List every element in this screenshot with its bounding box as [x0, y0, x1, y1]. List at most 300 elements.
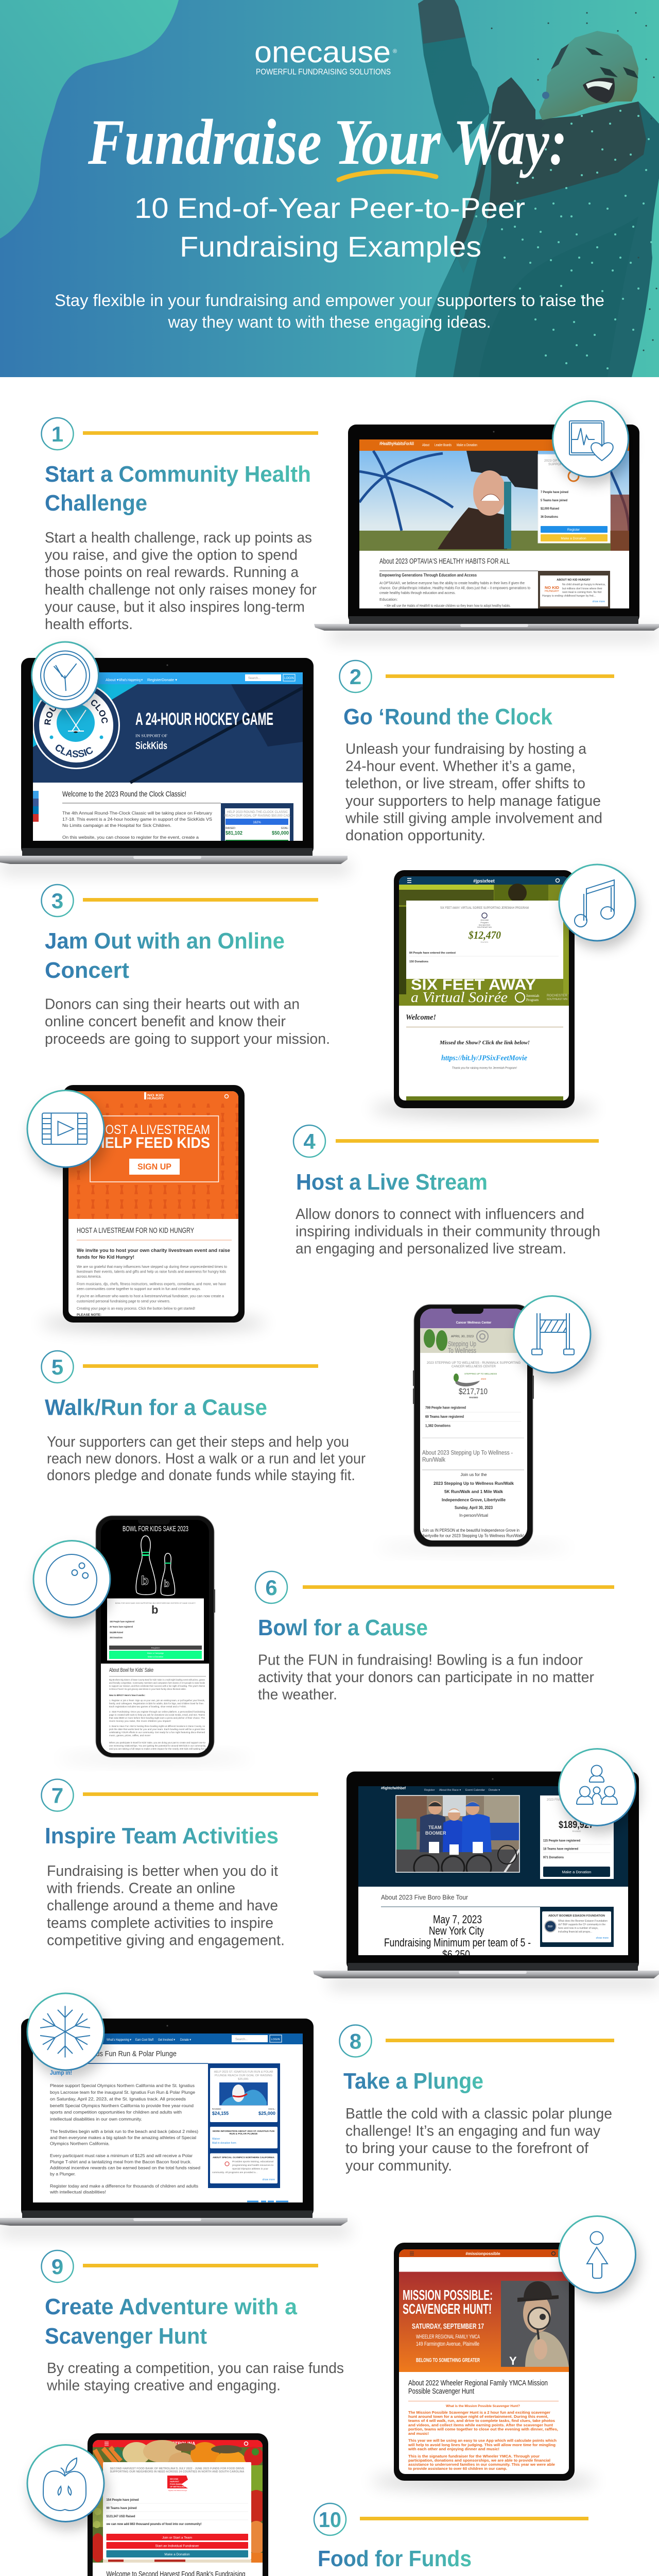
number badge 5: [41, 1351, 73, 1383]
laptop: Round the Clock Classic page: $81,102: [226, 831, 242, 836]
heading 9: Scavenger Hunt: [45, 2324, 207, 2349]
phone: Bowl for Kids Sake page: to support our mission, and then celebrate their success with a fun night of bowling. This year's theme: [109, 1685, 205, 1687]
laptop: OPTAVIA healthy habits page: next meal is coming from. No Kid: [562, 591, 601, 594]
panel: 10 Food for Funds: [27, 2433, 588, 2576]
phone: Bowl for Kids Sake page: family, and colleagues. Registration is $25 for adults, $15 for bigs, and children bowl for free.: [109, 1702, 204, 1705]
phone: Bowl for Kids Sake page: 293 Donations: [110, 1636, 123, 1639]
yellow underline swoosh: [339, 172, 436, 180]
tablet: Second Harvest Food Bank page: Together We Will End Hunger: [168, 2489, 187, 2492]
phone: Bowl for Kids Sake page: celebrating YOUR efforts in our community. Get ready for a fun night featuring disco-themed: [109, 1731, 205, 1734]
body text 5: donors pledge and donate funds while staying fit.: [47, 1467, 355, 1484]
body text 6: the weather.: [258, 1687, 337, 1703]
body text 3: Donors can sing their hearts out with an: [45, 996, 300, 1013]
logo: onecause: ®: [393, 48, 397, 55]
tablet: Six Feet Away virtual soiree page: Jeremiah: [480, 919, 489, 921]
phone: Stepping Up To Wellness page: [376, 1304, 571, 1550]
tablet: Second Harvest Food Bank page: 90 Teams have joined: [106, 2507, 137, 2510]
laptop: Five Boro Bike Tour page: 115 People have registered: [543, 1839, 580, 1842]
body text 1: health efforts.: [45, 616, 133, 633]
tablet: No Kid Hungry livestream page: HELP FEED KIDS: [95, 1134, 210, 1151]
phone: Stepping Up To Wellness page: STEPPING UP TO WELLNESS: [464, 1372, 497, 1375]
laptop: Round the Clock Classic page: What's Happening ▾: [119, 677, 143, 682]
tablet: Mission Possible scavenger hunt page: This year we will be using an easy to use App which will calculate points which: [408, 2438, 557, 2443]
photo: cyclists on city street: [396, 1796, 519, 1872]
laptop: St. Ignatius Fun Run and Polar Plunge page: Every participant must raise a minimum of $125 and will receive a Polar: [50, 2153, 193, 2158]
tablet: Second Harvest Food Bank page: Join or Start a Team: [162, 2536, 192, 2540]
heading 1: Start a Community Health: [45, 462, 311, 487]
phone: Stepping Up To Wellness page: CANCER WELLNESS CENTER: [452, 1365, 496, 1368]
body text 2: 24-hour event. Whether it’s a game,: [345, 758, 576, 775]
phone: Stepping Up To Wellness page: To Wellness: [448, 1346, 476, 1354]
laptop: Round the Clock Classic page: No Limits campaign at the Hospital for Sick Children.: [62, 823, 171, 828]
body text 5: Your supporters can get their steps and help you: [47, 1434, 349, 1450]
phone: Stepping Up To Wellness page: Join us for the: [460, 1472, 487, 1477]
tablet: Six Feet Away virtual soiree page: 84 People have entered the contest: [409, 952, 456, 955]
phone: Bowl for Kids Sake page: music, games, prizes, raffles, and more!: [109, 1734, 150, 1737]
icon: hurdle gate: [514, 1296, 591, 1372]
phone: Stepping Up To Wellness page: 1,382 Donations: [425, 1424, 450, 1428]
body text 1: your cause, but it also inspires long-term: [45, 599, 305, 615]
logo: onecause: POWERFUL FUNDRAISING SOLUTIONS: [256, 68, 391, 76]
laptop: St. Ignatius Fun Run and Polar Plunge page: Jump in!: [50, 2070, 72, 2076]
phone: Bowl for Kids Sake page: 26 Teams have registered: [110, 1625, 133, 1628]
laptop: St. Ignatius Fun Run and Polar Plunge page: and then everyone makes a big splash for the amazing athletes of Special: [50, 2135, 196, 2140]
laptop: Five Boro Bike Tour page: show more: [596, 1937, 609, 1940]
laptop: Five Boro Bike Tour page: Fundraising Minimum per team of 5 -: [384, 1936, 531, 1949]
laptop: OPTAVIA healthy habits page: #HealthyHabitsForAll: [379, 441, 414, 446]
badge: Round the Clock Classic logo: CLASSIC: [56, 744, 93, 757]
number badge 2: 2: [350, 665, 361, 689]
laptop: Round the Clock Classic page: 162%: [253, 821, 261, 824]
tablet: No Kid Hungry livestream page: SIGN UP: [137, 1162, 171, 1172]
laptop: OPTAVIA healthy habits page: NO KID: [545, 586, 559, 590]
number badge 1: 1: [51, 422, 63, 446]
body text 8: to bring your cause to the forefront of: [345, 2140, 589, 2157]
number badge 4: 4: [303, 1129, 316, 1154]
laptop: St. Ignatius Fun Run and Polar Plunge page: $25,000.: [238, 2078, 249, 2081]
phone: Bowl for Kids Sake page: [57, 1516, 252, 1761]
laptop: Round the Clock Classic page: IN SUPPORT OF: [135, 734, 167, 738]
hero gradient background: [0, 0, 659, 377]
tablet: Six Feet Away virtual soiree page: Thank you for raising money for Jeremiah Program!: [452, 1066, 517, 1070]
laptop: OPTAVIA healthy habits page: 2023 OPTAVIA'S: [544, 459, 570, 463]
tablet: Six Feet Away virtual soiree page: ROCHESTER: [479, 924, 490, 926]
number badge 9: [41, 2250, 73, 2282]
laptop: St. Ignatius Fun Run and Polar Plunge page: RUN & POLAR PLUNGE: [230, 2132, 258, 2136]
icon: team of people: [559, 1749, 635, 1826]
body text 4: Allow donors to connect with influencers and: [296, 1206, 584, 1223]
tablet: No Kid Hungry livestream page: [40, 1085, 267, 1331]
phone: Stepping Up To Wellness page: $217,710: [459, 1387, 488, 1396]
laptop: St. Ignatius Fun Run and Polar Plunge page: Get Involved ▾: [158, 2038, 176, 2042]
phone: Stepping Up To Wellness page: Cancer Wellness Center: [456, 1321, 492, 1325]
body text 3: online concert benefit and know their: [45, 1013, 286, 1030]
phone: Bowl for Kids Sake page: that raise $500 or more before their bowling night earn a pizza and pitcher of their choice. The: [109, 1717, 205, 1719]
laptop: OPTAVIA healthy habits page: No child should go hungry in America,: [562, 583, 605, 586]
tablet: Mission Possible scavenger hunt page: Possible Scavenger Hunt: [408, 2387, 474, 2396]
title: Fundraise Your Way:: [88, 107, 567, 178]
heading 7: Inspire Team Activities: [45, 1823, 279, 1849]
tablet: Second Harvest Food Bank page: $123,347 USD Raised: [106, 2515, 135, 2518]
laptop: OPTAVIA healthy habits page: At OPTAVIA®, we believe everyone has the ability to create healthy habits in their lives if given the: [379, 581, 525, 585]
tablet: Six Feet Away virtual soiree page: SIX FEET AWAY: [411, 976, 536, 993]
panel: 9 Create Adventure with a Scavenger Hunt: [41, 2216, 635, 2489]
phone: Stepping Up To Wellness page: 799 People have registered: [425, 1406, 466, 1410]
tablet: No Kid Hungry livestream page: PLEASE NOTE:: [77, 1313, 101, 1317]
tablet: Mission Possible scavenger hunt page: and music!: [408, 2431, 429, 2436]
phone: Bowl for Kids Sake page: BOWL FOR KIDS SAKE 2023: [123, 1524, 188, 1533]
laptop: Round the Clock Classic page: 17-18. This event is a 24-hour hockey game in support of the SickKids VS: [62, 817, 212, 822]
phone: Stepping Up To Wellness page: Join us IN PERSON at the beautiful Independence Grove in: [422, 1528, 519, 1533]
body text 7: competitive giving and engagement.: [47, 1932, 285, 1948]
laptop: Five Boro Bike Tour page: Donate ▾: [489, 1789, 500, 1792]
icon: video film strip: [27, 1090, 104, 1167]
laptop: St. Ignatius Fun Run and Polar Plunge page: benefit Special Olympics Northern California to provide free year-round: [50, 2103, 194, 2108]
laptop: OPTAVIA healthy habits page: About 2023 OPTAVIA'S HEALTHY HABITS FOR ALL: [379, 557, 510, 566]
laptop: St. Ignatius Fun Run and Polar Plunge page: Waiver: [212, 2138, 220, 2141]
laptop: Five Boro Bike Tour page: New York City: [429, 1924, 484, 1937]
laptop: OPTAVIA healthy habits page: but millions don't know where their: [562, 587, 602, 590]
laptop: OPTAVIA healthy habits page: Register: [567, 528, 580, 532]
laptop: OPTAVIA healthy habits page: Make a Donation: [457, 444, 477, 447]
confetti: [476, 111, 651, 368]
heading 3: [45, 928, 285, 983]
panel: 2 Go Round the Clock: [0, 641, 614, 894]
laptop: Round the Clock Classic page: HELP 2023 ROUND-THE-CLOCK CLASSIC: [227, 811, 288, 814]
body text 9: while staying creative and engaging.: [46, 2378, 281, 2394]
tablet: Six Feet Away virtual soiree page: SIX FEET AWAY: VIRTUAL SOIREE SUPPORTING JEREMIAH PROGRAM: [440, 907, 529, 910]
number badge 6: 6: [265, 1575, 278, 1600]
tablet: Six Feet Away virtual soiree page: ROCHESTER: [547, 994, 568, 997]
phone: Stepping Up To Wellness page: Sunday, April 30, 2023: [455, 1505, 493, 1510]
tablet: No Kid Hungry livestream page: Creating your page is an easy process. Click the button below to get started!: [77, 1306, 195, 1311]
number badge 3: 3: [51, 889, 63, 913]
phone: Stepping Up To Wellness page: 69 Teams have registered: [425, 1415, 464, 1419]
laptop: Five Boro Bike Tour page: Make a Donation: [562, 1870, 591, 1874]
phone: Bowl for Kids Sake page: Register: [151, 1647, 160, 1649]
tablet: Mission Possible scavenger hunt page: with each other and enjoying dinner and music!: [408, 2447, 499, 2451]
tablet: Mission Possible scavenger hunt page: About 2022 Wheeler Regional Family YMCA Mission: [408, 2379, 548, 2387]
laptop: Five Boro Bike Tour page: including financial aid progra...: [558, 1930, 592, 1934]
icon: health monitor with heart: [553, 401, 628, 477]
body text 1: [45, 530, 317, 633]
heading 3: Jam Out with an Online: [45, 928, 285, 954]
body text 7: [46, 1863, 285, 1948]
laptop: St. Ignatius Fun Run and Polar Plunge page: GOAL:: [268, 2108, 275, 2110]
tablet: No Kid Hungry livestream page: funds for No Kid Hungry!: [77, 1255, 134, 1260]
laptop: Five Boro Bike Tour page: 971 Donations: [543, 1856, 564, 1859]
panel: 6 Bowl for a Cause: [33, 1516, 614, 1761]
phone: Bowl for Kids Sake page: When you participate in Bowl for Kids' Sake, you are doing your part to create and support one-to-: [109, 1741, 206, 1744]
body text 7: Fundraising is better when you do it: [47, 1863, 278, 1879]
phone: Bowl for Kids Sake page: 1. Register or join a Team: Sign up on your own, join an existing team, or pull together your friends,: [109, 1699, 205, 1702]
tablet: Six Feet Away virtual soiree page: Jeremiah: [526, 994, 540, 998]
laptop: Five Boro Bike Tour page: What does the Boomer Esiason Foundation: [558, 1920, 608, 1923]
laptop: St. Ignatius Fun Run and Polar Plunge page: LOGIN: [271, 2038, 280, 2041]
tablet: Mission Possible scavenger hunt page: teams of 4 will walk, run, and drive to complete tasks, find clues, take photos: [408, 2418, 555, 2423]
body text 4: inspiring individuals in their community through: [296, 1224, 600, 1240]
heading 10: Food for Funds: [318, 2546, 472, 2571]
tablet: Mission Possible scavenger hunt page: portion, teams will come together to close out the evening with dinner, raffles,: [408, 2427, 558, 2432]
phone: Bowl for Kids Sake page: is Disco Fever! So get groovy and dress in your best funky disco-themed attire.: [109, 1688, 186, 1690]
laptop: St. Ignatius Fun Run and Polar Plunge page: Donate ▾: [180, 2038, 192, 2042]
tablet: Six Feet Away virtual soiree page: RAISED: [481, 941, 489, 943]
photo: cyclists on city street: BOOMER: [425, 1831, 446, 1836]
laptop: Round the Clock Classic page: Welcome to the 2023 Round the Clock Classic!: [62, 790, 186, 799]
tablet: Second Harvest Food Bank page: we can now add 863 thousand pounds of food into our community!: [106, 2523, 202, 2526]
icon: music notes: [559, 865, 635, 941]
phone: Bowl for Kids Sake page: one mentoring relationships. You are igniting the potential for around 500 kids in our community,: [109, 1744, 206, 1747]
body text 8: your community.: [345, 2158, 452, 2174]
laptop: Round the Clock Classic page: Search...: [248, 677, 261, 680]
tablet: Mission Possible scavenger hunt page: BELONG TO SOMETHING GREATER: [416, 2358, 480, 2364]
body: [415, 101, 659, 377]
phone: Bowl for Kids Sake page: b: [164, 1579, 169, 1589]
tablet: No Kid Hungry livestream page: If you're an influencer who wants to host a livestream/virtual fundraiser, you can now create a: [77, 1294, 224, 1298]
intro text: Stay flexible in your fundraising and empower your supporters to raise the: [55, 291, 604, 310]
tablet: Second Harvest Food Bank page: FOOD BANK: [170, 2483, 182, 2485]
phone: Bowl for Kids Sake page: Each registration includes two games of bowling, shoe rental and a T-shirt.: [109, 1705, 186, 1708]
tablet: Mission Possible scavenger hunt page: WHEELER REGIONAL FAMILY YMCA: [416, 2334, 480, 2340]
tablet: Six Feet Away virtual soiree page: https://bit.ly/JPSixFeetMovie: [441, 1054, 527, 1062]
tablet: Second Harvest Food Bank page: [64, 2433, 291, 2576]
tablet: Mission Possible scavenger hunt page: 149 Farmington Avenue, Plainville: [416, 2341, 479, 2347]
laptop: Five Boro Bike Tour page: 18 Teams have registered: [543, 1848, 578, 1851]
heading 2: Go ‘Round the Clock: [343, 704, 552, 730]
laptop: St. Ignatius Fun Run and Polar Plunge page: sports and competition opportunities for children and adults with: [50, 2109, 182, 2114]
tablet: Second Harvest Food Bank page: 154 People have joined: [106, 2499, 139, 2502]
phone: Stepping Up To Wellness page: APRIL 30, 2023: [451, 1335, 474, 1338]
laptop: Five Boro Bike Tour page: About the Race ▾: [439, 1789, 461, 1792]
laptop: St. Ignatius Fun Run and Polar Plunge page: The festivities begin with a brisk run to the beach and back (about 2 miles): [50, 2129, 198, 2134]
phone: Stepping Up To Wellness page: 2023 STEPPING UP TO WELLNESS - RUN/WALK SUPPORTING: [427, 1361, 521, 1365]
panel: 7 Inspire Team Activities: [41, 1749, 659, 1989]
icon: person with up arrow: [559, 2216, 635, 2293]
phone: Bowl for Kids Sake page: and friendly competition. Community members and companies form teams of 4-6 people to raise funds: [109, 1682, 205, 1684]
panel: 4 Host a Live Stream: [27, 1085, 600, 1331]
tablet: Six Feet Away virtual soiree page: 150 Donations: [409, 960, 428, 963]
heading 5: Walk/Run for a Cause: [45, 1395, 267, 1420]
tablet: Six Feet Away virtual soiree page: Welcome!: [406, 1013, 436, 1022]
tablet: Six Feet Away virtual soiree page: a Virtual Soirée: [411, 990, 508, 1006]
laptop: St. Ignatius Fun Run and Polar Plunge page: Register today and make a difference for thousands of children and adults: [50, 2183, 198, 2189]
body text 1: Start a health challenge, rack up points as: [45, 530, 312, 546]
eyes and mouth: [585, 47, 638, 78]
phone: Stepping Up To Wellness page: In-person/Virtual: [459, 1513, 488, 1518]
laptop: OPTAVIA healthy habits page: • We will use the Habits of Health® to educate children so they learn how to adopt healthy habits.: [385, 603, 511, 608]
raised arm: [418, 0, 489, 153]
body text 2: while still giving ample involvement and: [345, 810, 602, 826]
tablet: No Kid Hungry livestream page: From musicians, djs, chefs, fitness instructors, wellness experts, comedians, and more, we have: [77, 1282, 226, 1286]
subtitle: [134, 192, 525, 263]
tablet: Mission Possible scavenger hunt page: to provide assistance to over 60 children in our camp.: [408, 2466, 507, 2471]
body text 1: those points on real rewards. Running a: [45, 564, 299, 581]
phone: Bowl for Kids Sake page: and you are taking a full steps to make a BIG impact for the nearly 200 kids still waiting for a: [109, 1748, 206, 1750]
tablet: Mission Possible scavenger hunt page: will help to avoid long lines for judging. This will allow more time for mingling: [408, 2443, 556, 2447]
tablet: Second Harvest Food Bank page: SECOND HARVEST FOOD BANK OF METROLINA'S JULY 2022 - JUNE 2023 FUNDS FOR FOOD DRIVE: [110, 2467, 245, 2470]
laptop: St. Ignatius Fun Run and Polar Plunge page: Olympics Northern California.: [50, 2141, 110, 2146]
heading 6: Bowl for a Cause: [258, 1615, 428, 1640]
tablet: No Kid Hungry livestream page: customized personal fundraising page to send your viewers.: [77, 1299, 170, 1303]
body text 8: challenge! It’s an engaging and fun way: [345, 2123, 600, 2140]
photo: detective with magnifying glass: [501, 2281, 569, 2367]
laptop: Five Boro Bike Tour page: 2023 FIVE BORO: [547, 1799, 571, 1802]
laptop: OPTAVIA healthy habits page: create healthy habits through education and access.: [379, 590, 456, 595]
tablet: No Kid Hungry livestream page: HOST A LIVESTREAM: [97, 1123, 210, 1137]
number badge 10: [314, 2503, 346, 2535]
laptop: Five Boro Bike Tour page: May 7, 2023: [433, 1913, 482, 1926]
tablet: No Kid Hungry livestream page: We invite you to host your own charity livestream event and raise: [77, 1248, 230, 1253]
tablet: Mission Possible scavenger hunt page: This is the signature fundraiser for the Wheeler YMCA. Through your: [408, 2454, 540, 2459]
laptop: Round the Clock Classic page: GOAL:: [281, 827, 289, 830]
photo: vegetables: [91, 2440, 268, 2563]
panel: 1 Start a Community Health Challenge: [41, 401, 659, 641]
laptop: St. Ignatius Fun Run and Polar Plunge page: RAISED:: [212, 2108, 221, 2110]
laptop: St. Ignatius Fun Run and Polar Plunge page: with intellectual disabilities!: [49, 2190, 106, 2195]
laptop: Five Boro Bike Tour page: RAISED: [573, 1830, 581, 1833]
laptop: Round the Clock Classic page: SickKids: [135, 740, 167, 752]
laptop: St. Ignatius Fun Run and Polar Plunge page: MORE INFORMATION ABOUT 2023 ST. IGNATIUS FUN: [213, 2130, 275, 2133]
tablet: Mission Possible scavenger hunt page: SCAVENGER HUNT!: [403, 2301, 492, 2317]
photo: celebrating woman: [415, 0, 659, 377]
phone: Bowl for Kids Sake page: BOWL FOR KIDS SAKE 2023 SUPPORTING BIG BROTHERS BIG SISTERS OF DANE COUNTY: [115, 1602, 196, 1604]
phone: Stepping Up To Wellness page: Independence Grove, Libertyville: [442, 1497, 506, 1502]
body text 3: proceeds are going to support your mission.: [45, 1031, 330, 1047]
laptop: OPTAVIA healthy habits page: Make a Donation: [561, 537, 586, 540]
laptop: St. Ignatius Fun Run and Polar Plunge page: $25,000: [258, 2111, 275, 2116]
hero banner: [0, 0, 659, 377]
tablet: Six Feet Away virtual soiree page: $12,470: [468, 929, 501, 941]
tablet: Second Harvest Food Bank page: Make a Donation: [164, 2553, 190, 2556]
laptop: Round the Clock Classic page: RAISED:: [226, 827, 236, 830]
decorative teal blob: [0, 0, 179, 239]
phone: Stepping Up To Wellness page: About 2023 Stepping Up To Wellness -: [422, 1450, 513, 1456]
phone: Bowl for Kids Sake page: pick the date that works best for you and your team. Each bowling event will be a great time: [109, 1728, 205, 1731]
body text 7: with friends. Create an online: [46, 1880, 235, 1897]
number badge 8: [340, 2025, 372, 2057]
laptop: St. Ignatius Fun Run and Polar Plunge page: Earn Cool Stuff: [135, 2038, 153, 2042]
laptop: Round the Clock Classic page: On this website, you can choose to register for the event, create a: [62, 835, 199, 840]
phone: Bowl for Kids Sake page: b: [151, 1603, 158, 1616]
phone: Bowl for Kids Sake page: 193 People have registered: [110, 1620, 134, 1623]
panel: 5 Walk/Run for a Cause: [41, 1296, 591, 1550]
laptop: Round the Clock Classic page: A 24-HOUR HOCKEY GAME: [135, 709, 273, 729]
laptop: St. Ignatius Fun Run and Polar Plunge page: community. All programs are provided a...: [212, 2171, 257, 2174]
laptop: Five Boro Bike Tour page: here and now in a number of ways,: [558, 1927, 598, 1930]
phone: Bowl for Kids Sake page: 3. Bowl & Have Fun: We're hosting three bowling nights at different locations in Dane County, so: [109, 1725, 205, 1727]
tablet: Six Feet Away virtual soiree page: SOUTHEAST MN: [477, 926, 492, 928]
number badge 2: [340, 660, 372, 692]
body text 4: an engaging and personalized live stream.: [296, 1241, 566, 1257]
laptop: St. Ignatius Fun Run and Polar Plunge page: What's Happening ▾: [107, 2038, 132, 2042]
tablet: Mission Possible scavenger hunt page: hunt around town for a unique night of entertainment. During this event,: [408, 2414, 548, 2419]
laptop: St. Ignatius Fun Run and Polar Plunge page: by a Plunger.: [50, 2171, 76, 2176]
laptop: Five Boro Bike Tour page: [313, 1771, 659, 1989]
phone: Stepping Up To Wellness page: 5K Run/Walk and 1 Mile Walk: [444, 1489, 503, 1494]
intro text: way they want to with these engaging ideas.: [167, 313, 491, 331]
body text 8: [345, 2106, 612, 2174]
tablet: No Kid Hungry livestream page: seen communities come together to support our work in fun and creative ways.: [77, 1286, 201, 1291]
heading 1: [45, 462, 311, 516]
phone: Stepping Up To Wellness page: Libertyville for our 2023 Stepping Up To Wellness Run/Walk!: [420, 1533, 524, 1538]
laptop: OPTAVIA healthy habits page: ABOUT NO KID HUNGRY: [557, 579, 591, 582]
phone: Bowl for Kids Sake page: Make a Donation: [148, 1655, 163, 1658]
tablet: Six Feet Away virtual soiree page: SOUTHEAST MN: [547, 998, 567, 1001]
laptop: OPTAVIA healthy habits page: Hungry is ending childhood hunger by fnd...: [542, 595, 596, 598]
body text 5: reach new donors. Host a walk or a run and let your: [47, 1450, 366, 1467]
laptop: St. Ignatius Fun Run and Polar Plunge page: Search...: [235, 2038, 248, 2041]
phone: Stepping Up To Wellness page: 2023 Stepping Up to Wellness Run/Walk: [433, 1481, 514, 1486]
laptop: St. Ignatius Fun Run and Polar Plunge page: HELP 2023 ST. IGNATIUS FUN RUN & POLAR: [214, 2071, 273, 2074]
tablet: Six Feet Away virtual soiree page: Program: [526, 998, 539, 1002]
laptop: OPTAVIA healthy habits page: SUPPORTING: [548, 463, 570, 466]
body text 7: challenge around a theme and have: [47, 1897, 278, 1914]
body text 4: [296, 1206, 600, 1257]
laptop: St. Ignatius Fun Run and Polar Plunge page: intellectual disabilities in our own community.: [50, 2116, 142, 2122]
laptop: St. Ignatius Fun Run and Polar Plunge page: on Saturday, April 22, 2023, at the St. Ignatius track. All proceeds: [50, 2096, 186, 2102]
laptop: St. Ignatius Fun Run and Polar Plunge page: $24,155: [212, 2111, 229, 2116]
phone: Bowl for Kids Sake page: page is created with tools to help you ask for donations via social media, email, and text. Teams: [109, 1714, 205, 1716]
body text 2: your supporters to help manage fatigue: [345, 793, 601, 809]
phone: Bowl for Kids Sake page: more money you raise, the more children you impact!: [109, 1720, 171, 1722]
subtitle: 10 End-of-Year Peer-to-Peer: [134, 192, 525, 224]
heading 9: [45, 2294, 298, 2349]
laptop: Round the Clock Classic page: [0, 658, 351, 879]
number badge 1: [41, 418, 73, 450]
laptop: St. Ignatius Fun Run and Polar Plunge page: PLUNGE REACH OUR GOAL OF RAISING: [215, 2074, 272, 2077]
laptop: St. Ignatius Fun Run and Polar Plunge page: Please support Special Olympics Northern California and the St. Ignatius: [50, 2083, 195, 2088]
laptop: St. Ignatius Fun Run and Polar Plunge page: Mail-in donation form: [212, 2142, 236, 2145]
laptop: Five Boro Bike Tour page: $189,927: [559, 1820, 594, 1831]
laptop: St. Ignatius Fun Run and Polar Plunge page: Provides sports training, educational: [232, 2160, 273, 2163]
body text 2: telethon, or live stream, offer shifts to: [345, 775, 585, 792]
body text 2: donation opportunity.: [345, 827, 485, 844]
laptop: Five Boro Bike Tour page: do? BEF supports the CF community in the: [558, 1923, 605, 1926]
body text 8: Battle the cold with a classic polar plunge: [345, 2106, 612, 2122]
laptop: St. Ignatius Fun Run and Polar Plunge page: ABOUT SPECIAL OLYMPICS NORTHERN CALIFORNIA: [213, 2156, 275, 2159]
laptop: Round the Clock Classic page: REACH OUR GOAL OF RAISING $50,000 CAD.: [224, 815, 291, 818]
heading 9: Create Adventure with a: [45, 2294, 298, 2319]
heading 8: Take a Plunge: [343, 2069, 483, 2094]
laptop: Round the Clock Classic page: The 4th Annual Round-The-Clock Classic will be taking place on February: [62, 810, 213, 816]
laptop: OPTAVIA healthy habits page: About: [422, 444, 429, 447]
tablet: Second Harvest Food Bank page: HARVEST: [170, 2481, 180, 2483]
body text 7: teams complete activities to inspire: [47, 1915, 273, 1931]
laptop: St. Ignatius Fun Run and Polar Plunge page: 2023 St. Ignatius Fun Run & Polar Plunge: [53, 2049, 177, 2058]
body text 2: [345, 741, 602, 844]
phone: Bowl for Kids Sake page: b: [141, 1574, 149, 1588]
phone: Bowl for Kids Sake page: New to BFKS? Here's how it works:: [109, 1694, 145, 1697]
tablet: Mission Possible scavenger hunt page: SATURDAY, SEPTEMBER 17: [412, 2322, 484, 2331]
laptop: Round the Clock Classic page: $50,000: [272, 831, 289, 836]
tablet: Second Harvest Food Bank page: OF METROLINA: [170, 2486, 185, 2488]
body text 1: health challenge not only raises money for: [45, 582, 317, 598]
body text 5: [47, 1434, 366, 1484]
body text 9: [46, 2360, 344, 2394]
laptop: OPTAVIA healthy habits page: HUNGRY: [545, 590, 560, 593]
number badge 7: 7: [51, 1784, 63, 1807]
phone: Stepping Up To Wellness page: 2023: [481, 1378, 487, 1380]
tablet: Second Harvest Food Bank page: Start an Individual Fundraiser: [155, 2544, 199, 2548]
number badge 10: 10: [319, 2507, 341, 2532]
tablet: Second Harvest Food Bank page: SECOND: [170, 2478, 179, 2480]
laptop: St. Ignatius Fun Run and Polar Plunge page: boys Lacrosse team for the inaugural St. Ignatius Fun Run & Polar Plunge: [50, 2090, 195, 2095]
laptop: St. Ignatius Fun Run and Polar Plunge page: Plunge T-shirt and a tantalizing meal from the Bacon Bacon food truck.: [50, 2159, 192, 2164]
number badge 4: [293, 1125, 325, 1157]
intro text: [55, 291, 604, 331]
photo: detective with magnifying glass: Y: [509, 2354, 517, 2367]
phone: Bowl for Kids Sake page: Big Brothers Big Sisters of Dane County Bowl for Kids' Sake is a multi-night bowling event with prizes, games: [109, 1679, 205, 1681]
